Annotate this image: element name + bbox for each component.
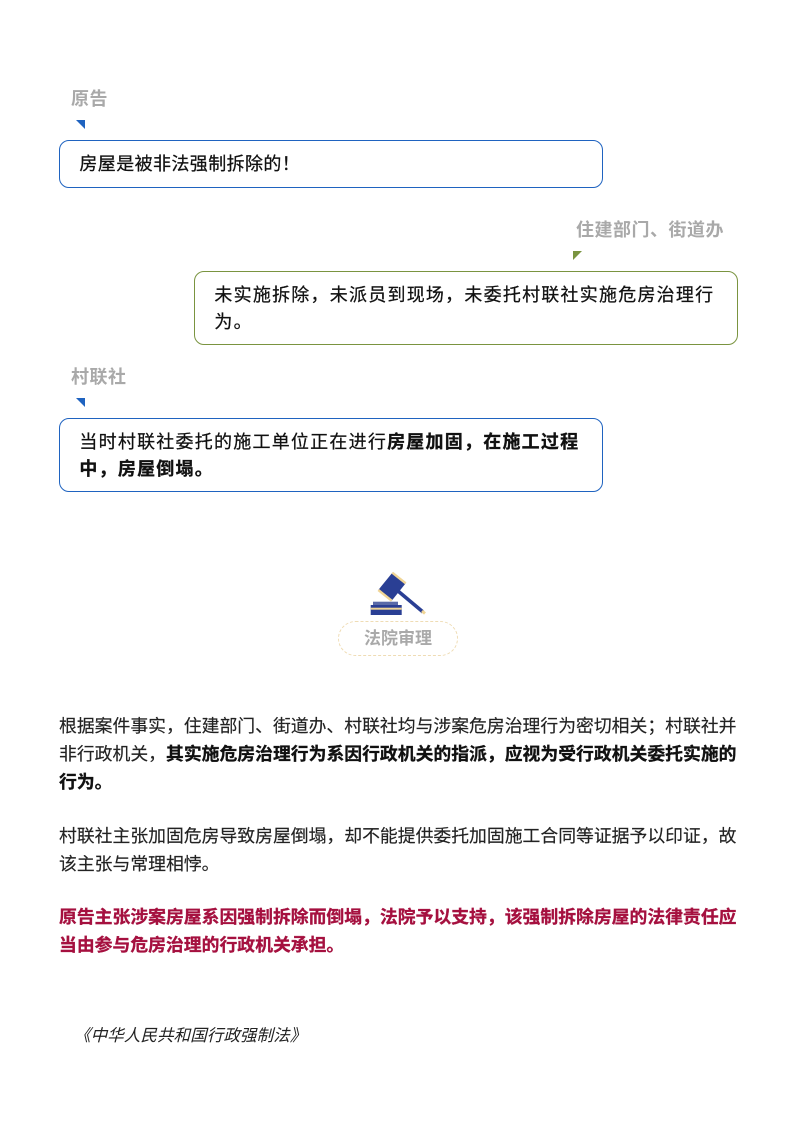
- paragraph: court finding: 非行政机关，其实施危房治理行为系因行政机关的指派，应视为受行政机关委托实施的: [59, 744, 736, 764]
- speaker label: plaintiff: 原告: [71, 89, 108, 109]
- speech bubble: department: 未实施拆除，未派员到现场，未委托村联社实施危房治理行: [214, 285, 714, 305]
- speech bubble: plaintiff: [59, 140, 603, 188]
- paragraph: court finding: [59, 716, 736, 792]
- badge: court review: 法院审理: [364, 629, 432, 648]
- speech bubble: village committee: 中，房屋倒塌。: [79, 459, 214, 479]
- paragraph: court finding: 行为。: [59, 772, 112, 792]
- marker: plaintiff triangle: [76, 120, 85, 129]
- conclusion: court holding: 当由参与危房治理的行政机关承担。: [59, 935, 344, 955]
- paragraph: court finding: 根据案件事实，住建部门、街道办、村联社均与涉案危房治理行为密切相关；村联社并: [59, 716, 736, 736]
- icon: gavel: [370, 572, 426, 615]
- speaker label: housing department and sub-district office: 住建部门、街道办: [576, 220, 724, 240]
- paragraph: village claim rejected: 村联社主张加固危房导致房屋倒塌，却不能提供委托加固施工合同等证据予以印证，故: [59, 826, 736, 846]
- conclusion: court holding: 原告主张涉案房屋系因强制拆除而倒塌，法院予以支持，该强制拆除房屋的法律责任应: [59, 907, 736, 927]
- speech bubble: village committee: 当时村联社委托的施工单位正在进行房屋加固，在施工过程: [79, 432, 579, 452]
- speech bubble: department: 为。: [214, 312, 253, 332]
- paragraph: village claim rejected: 该主张与常理相悖。: [59, 854, 219, 874]
- marker: department triangle: [573, 251, 582, 260]
- paragraph: village claim rejected: [59, 826, 736, 874]
- conclusion: court holding: [59, 907, 736, 955]
- legal citation: 《中华人民共和国行政强制法》: [74, 1026, 306, 1045]
- speaker label: village committee: 村联社: [71, 367, 126, 387]
- badge: court review: [338, 621, 458, 656]
- speech bubble: plaintiff: 房屋是被非法强制拆除的！: [79, 154, 300, 174]
- speech bubble: department: [194, 271, 738, 345]
- marker: village triangle: [76, 398, 85, 407]
- speech bubble: village committee: [59, 418, 603, 492]
